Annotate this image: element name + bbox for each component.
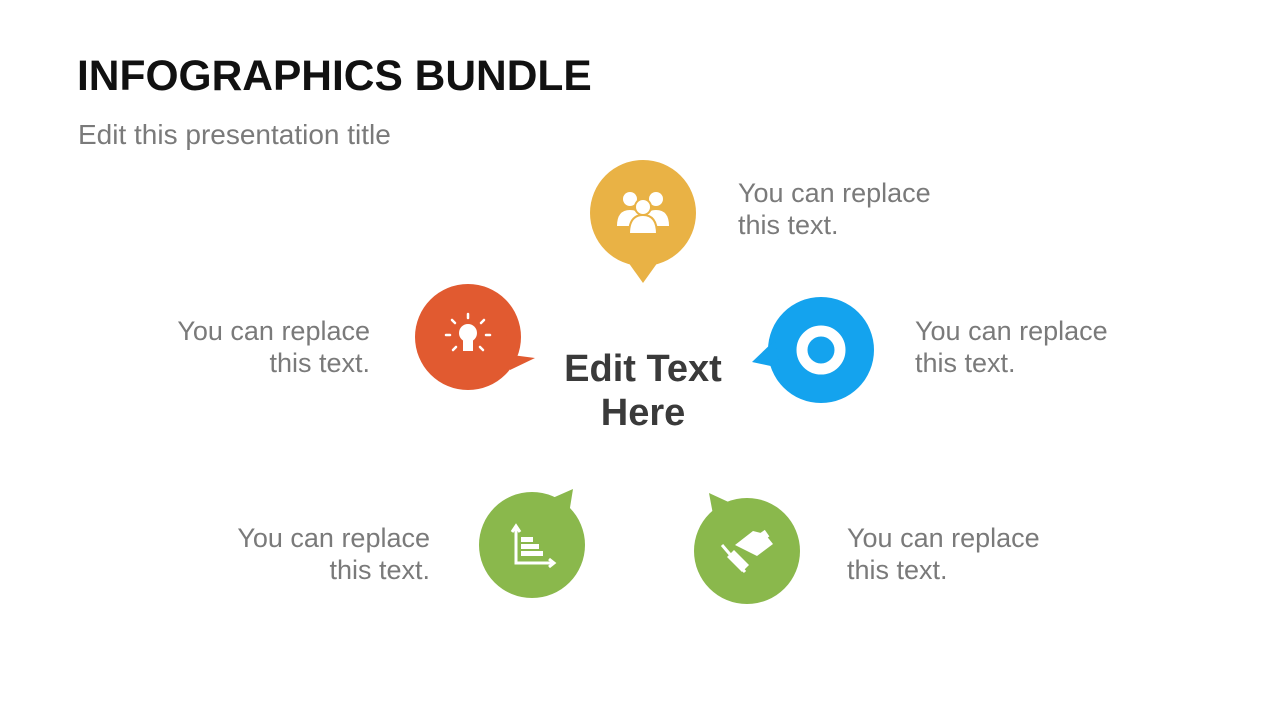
text: left [177,316,370,378]
center text: Here [601,392,685,434]
text: left: You can replace [177,316,370,346]
text: left: this text. [269,348,370,378]
icon: chart [512,526,554,567]
center text: Edit Text [564,348,722,390]
text: bottom right [847,523,1040,585]
bubble: green handshake [694,493,800,604]
text: right: this text. [915,348,1016,378]
text: right: You can replace [915,316,1108,346]
text: bottom left: You can replace [237,523,430,553]
text: bottom left [237,523,430,585]
text: top [738,178,931,240]
text: top: You can replace [738,178,931,208]
bubble: yellow people [590,160,696,283]
text: top: this text. [738,210,839,240]
text: bottom right: this text. [847,555,948,585]
title: INFOGRAPHICS BUNDLE [77,53,592,100]
icon: cycle [802,331,840,369]
center text [564,348,722,434]
bubble: blue cycle [752,297,874,403]
text: bottom left: this text. [329,555,430,585]
icon: handshake [722,530,773,572]
text: bottom right: You can replace [847,523,1040,553]
bubble: green chart [479,489,585,598]
subtitle: Edit this presentation title [78,119,391,150]
icon: people [617,192,669,234]
icon: lightbulb [446,314,490,351]
text: right [915,316,1108,378]
bubble: orange bulb [415,284,535,390]
